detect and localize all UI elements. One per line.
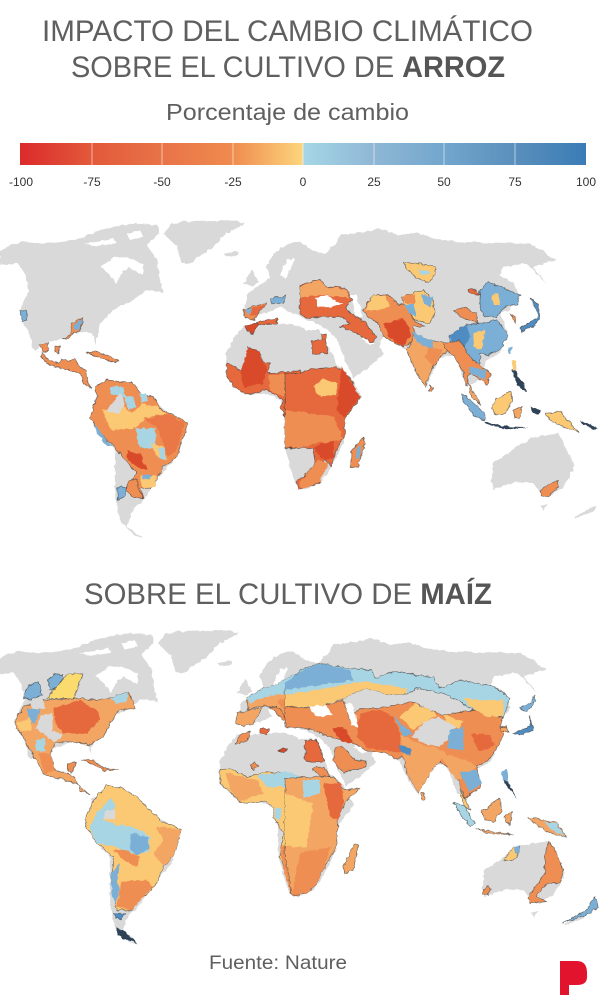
title: SOBRE EL CULTIVO DE ARROZ	[71, 51, 505, 84]
colour scale legend: 50	[437, 175, 451, 189]
colour scale legend: -25	[224, 175, 242, 189]
map: maize	[0, 630, 598, 945]
colour scale legend	[9, 143, 596, 189]
colour scale legend: 75	[508, 175, 522, 189]
colour scale legend: 0	[300, 175, 307, 189]
colour scale legend: -75	[83, 175, 101, 189]
maize: Eurasia, Africa and Oceania	[285, 663, 598, 923]
maize: the Americas	[15, 672, 300, 943]
colour scale legend: 25	[367, 175, 381, 189]
map: rice	[0, 221, 598, 538]
title	[42, 15, 533, 84]
colour scale legend: 100	[576, 175, 596, 189]
title: IMPACTO DEL CAMBIO CLIMÁTICO	[42, 15, 533, 48]
colour scale legend: -100	[9, 175, 33, 189]
rice: the Americas	[20, 296, 300, 500]
rice: Africa, Asia and Oceania	[285, 262, 598, 497]
colour scale legend: -50	[153, 175, 171, 189]
heading: maize: SOBRE EL CULTIVO DE MAÍZ	[84, 577, 492, 611]
source note: Fuente: Nature	[209, 953, 347, 974]
legend heading: Porcentaje de cambio	[166, 99, 409, 125]
logo	[560, 961, 587, 995]
